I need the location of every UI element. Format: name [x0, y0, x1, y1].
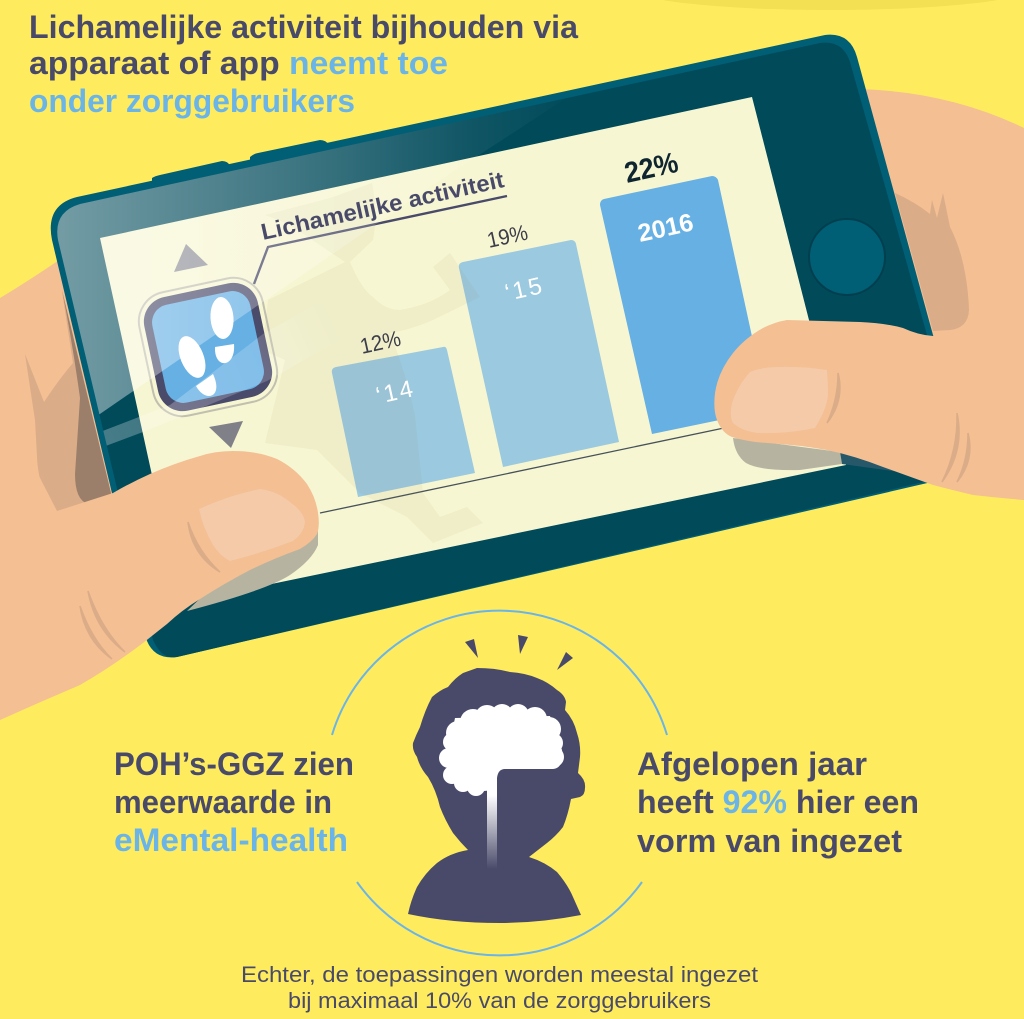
- bar: 2014: [332, 347, 475, 497]
- bar: 2016: [600, 176, 768, 434]
- title: [29, 9, 578, 119]
- icon: head with brain: [408, 635, 585, 923]
- screen glare: [57, 108, 522, 446]
- icon: activity button with footprints: [133, 196, 507, 448]
- footnote text: bij maximaal 10% van de zorggebruikers: [288, 988, 711, 1013]
- value 12%: 12%: [358, 326, 403, 359]
- text block: right statement: vorm van ingezet: [637, 823, 902, 859]
- icon: footprints: [173, 296, 235, 396]
- label 2016: 2016: [635, 208, 696, 248]
- idea rays: [465, 635, 573, 670]
- phone buttons: [152, 140, 329, 183]
- faint figure on screen: [262, 183, 483, 543]
- value 19%: 19%: [485, 220, 530, 253]
- left hand behind phone: [0, 258, 140, 700]
- footnote text: [241, 962, 758, 1013]
- thumb creases: [188, 522, 220, 572]
- phone: [51, 35, 975, 657]
- phone screen: [100, 97, 846, 603]
- right hand behind phone: [860, 89, 1024, 500]
- bar values and labels: [358, 147, 696, 410]
- text block: left statement: meerwaarde in: [114, 784, 332, 820]
- right thumb shadow: [733, 438, 907, 473]
- left hand thumb: [0, 400, 319, 720]
- icon: down arrow: [209, 421, 243, 448]
- label 14: ‘14: [373, 375, 415, 410]
- left thumb shadow: [187, 531, 318, 611]
- thumb nail: [731, 367, 828, 433]
- head silhouette: [408, 668, 585, 923]
- footnote text: Echter, de toepassingen worden meestal ingezet: [241, 962, 758, 987]
- title: Lichamelijke activiteit bijhouden via: [29, 9, 578, 45]
- home button: [809, 219, 885, 295]
- brain stem: [487, 790, 497, 869]
- title: onder zorggebruikers: [29, 83, 355, 119]
- bar: 2015: [459, 240, 619, 467]
- top-right decorative ellipse: [630, 0, 1024, 10]
- text block: right statement: [637, 746, 919, 859]
- text block: right statement: heeft 92% hier een: [637, 784, 919, 820]
- thumb creases: [827, 373, 840, 423]
- chart title: Lichamelijke activiteit: [258, 166, 507, 245]
- text block: left statement: [114, 746, 354, 858]
- label 15: ‘15: [502, 272, 544, 307]
- thumb nail: [199, 489, 305, 561]
- phone body: [51, 35, 975, 657]
- chart baseline: [320, 428, 724, 513]
- callout line: [254, 196, 507, 284]
- decorative circle arcs: [332, 611, 667, 955]
- brain: [439, 704, 564, 796]
- bar chart: [320, 176, 768, 513]
- value 22%: 22%: [622, 147, 681, 190]
- right hand thumb: [714, 320, 1024, 500]
- text block: left statement: eMental-health: [114, 822, 348, 858]
- title: apparaat of app neemt toe: [29, 45, 448, 81]
- text block: left statement: POH’s-GGZ zien: [114, 746, 354, 782]
- icon: up arrow: [174, 244, 208, 272]
- text block: right statement: Afgelopen jaar: [637, 746, 867, 782]
